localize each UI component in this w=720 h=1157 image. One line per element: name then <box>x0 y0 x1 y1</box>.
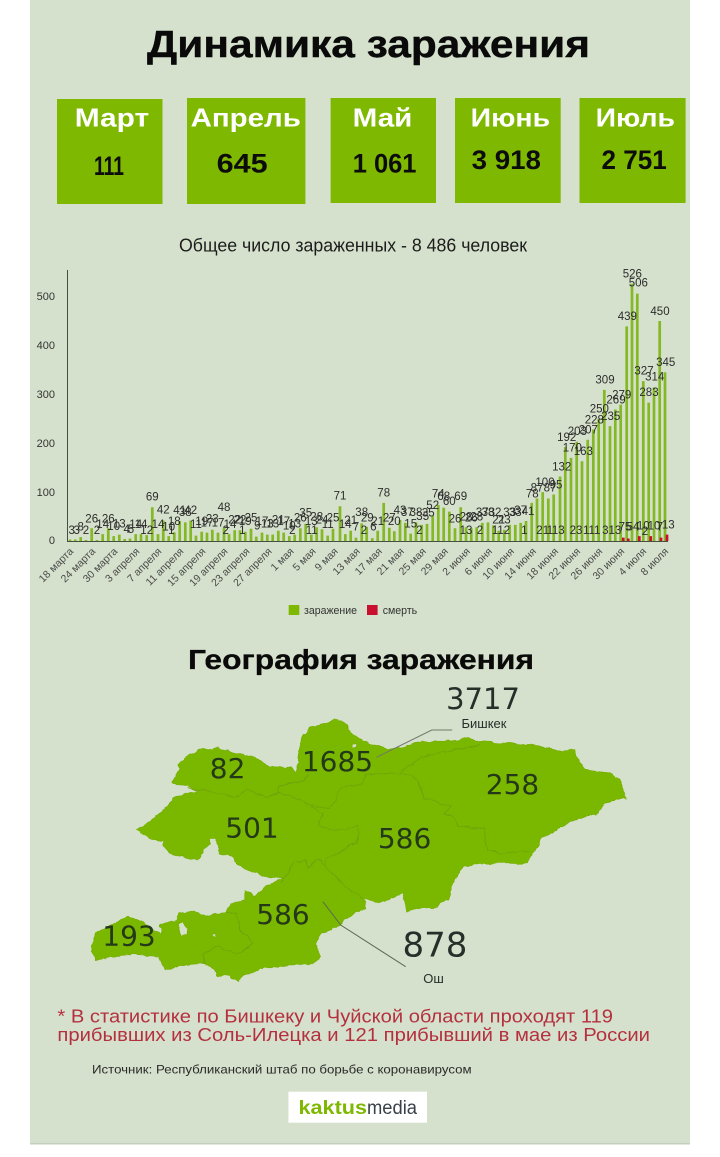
callout: Bishkek <box>446 682 520 731</box>
data labels: 23 <box>498 514 511 526</box>
x axis date labels: 8 июля <box>639 546 671 578</box>
data labels: 69 <box>146 492 159 504</box>
data labels: 3 <box>73 525 80 537</box>
data labels: 28 <box>310 512 323 524</box>
data labels: 32 <box>489 507 501 519</box>
data labels: 26 <box>102 514 115 526</box>
map: Kyrgyzstan regions <box>92 682 627 986</box>
data labels: 17 <box>201 518 213 530</box>
data labels: 170 <box>563 443 582 455</box>
data labels: 5 <box>128 524 134 536</box>
data labels: 69 <box>454 491 467 503</box>
data labels: 78 <box>377 488 390 500</box>
data labels: 11 <box>190 519 202 531</box>
callout: Bishkek: 3717 <box>446 682 520 716</box>
data labels: 33 <box>503 507 516 519</box>
y axis labels <box>37 291 55 547</box>
chart legend: смерть <box>383 605 417 617</box>
x axis date labels: 18 марта <box>37 546 76 585</box>
data labels: 38 <box>355 507 368 519</box>
x axis date labels: 25 мая <box>397 546 429 578</box>
data labels: 37 <box>401 507 414 519</box>
data labels: 18 <box>168 516 181 528</box>
data labels: 17 <box>256 516 268 528</box>
card: May <box>331 98 436 203</box>
heading: geography: География заражения <box>188 644 534 675</box>
x axis date labels: 19 апреля <box>187 546 230 589</box>
data labels: 22 <box>234 514 246 526</box>
data labels <box>68 269 675 538</box>
region values: 586 <box>378 822 431 855</box>
chart legend <box>289 605 417 617</box>
data labels: 78 <box>526 488 539 500</box>
data labels: 17 <box>277 516 290 528</box>
x axis date labels: 26 июня <box>568 546 605 582</box>
data labels: 48 <box>218 502 230 514</box>
data labels: 25 <box>327 513 339 525</box>
death bars <box>623 535 667 541</box>
y axis labels: 200 <box>37 438 55 450</box>
data labels: 87 <box>531 483 543 495</box>
data labels: 71 <box>334 490 346 502</box>
data labels: 21 <box>492 514 505 526</box>
data labels: 27 <box>383 513 396 525</box>
x axis date labels: 4 июля <box>617 546 649 578</box>
data labels: 21 <box>272 514 285 526</box>
x axis date labels: 18 июня <box>524 546 561 582</box>
data labels: 112 <box>492 525 510 537</box>
data labels: 327 <box>634 365 654 377</box>
data labels: 283 <box>639 387 659 399</box>
data labels: 38 <box>179 507 192 519</box>
data labels: 14 <box>224 519 237 531</box>
data labels: 20 <box>388 516 401 528</box>
card: July <box>580 98 686 203</box>
x axis date labels: 11 апреля <box>144 546 186 588</box>
data labels: 22 <box>228 514 241 526</box>
data labels: 26 <box>85 514 98 526</box>
data labels: 2 <box>642 526 648 538</box>
data labels: 13 <box>261 519 274 531</box>
callout: Osh <box>403 926 467 986</box>
x axis date labels: 7 апреля <box>125 546 164 585</box>
x axis date labels <box>37 546 671 589</box>
leader line: Bishkek <box>376 730 452 757</box>
region values <box>102 745 539 953</box>
title: Динамика заражения <box>147 24 590 66</box>
data labels: 42 <box>184 505 197 517</box>
x axis date labels: 22 июня <box>546 546 583 582</box>
data labels: 37 <box>476 507 489 519</box>
y axis labels: 500 <box>37 291 55 303</box>
data labels: 33 <box>509 507 522 519</box>
card: March: Март <box>75 103 149 133</box>
x axis date labels: 27 апреля <box>231 546 275 589</box>
data labels: 10 <box>162 522 175 534</box>
data labels: 11 <box>306 525 318 537</box>
data labels: 526 <box>623 269 642 281</box>
footnote <box>57 1007 650 1045</box>
data labels: 2 <box>94 525 100 537</box>
card: April: Апрель <box>191 103 301 133</box>
data labels: 26 <box>449 513 461 525</box>
x axis date labels: 15 апреля <box>165 546 208 589</box>
data labels: 41 <box>522 506 534 518</box>
x axis date labels: 29 мая <box>419 546 451 578</box>
card: June: Июнь <box>471 103 550 133</box>
data labels: 203 <box>568 426 587 438</box>
x axis date labels: 3 апреля <box>103 546 142 585</box>
data labels: 19 <box>239 516 252 528</box>
data labels: 8 <box>77 522 84 534</box>
data labels: 2 <box>361 525 367 537</box>
data labels: 228 <box>585 414 604 426</box>
data labels: 52 <box>426 500 439 512</box>
x axis date labels: 1 мая <box>269 546 297 574</box>
logo: kaktus media: kaktus <box>298 1098 367 1119</box>
data labels: 28 <box>470 512 483 524</box>
callout: Osh: 878 <box>403 926 467 966</box>
data labels: 14 <box>339 519 352 531</box>
data labels: 95 <box>550 479 562 491</box>
source line: Источник: Республиканский штаб по борьбе с коронавирусом <box>92 1062 472 1076</box>
x axis date labels: 14 июня <box>502 546 539 582</box>
data labels: 35 <box>299 508 312 520</box>
x axis date labels: 10 июня <box>480 546 517 582</box>
footnote: * В статистике по Бишкеку и Чуйской области проходят 119 <box>57 1007 613 1027</box>
data labels: 35 <box>422 508 435 520</box>
x axis date labels: 30 июня <box>590 546 627 582</box>
data labels: 24 <box>316 514 329 526</box>
data labels: 23 <box>570 525 582 537</box>
axes <box>68 270 668 542</box>
data labels: 163 <box>574 446 593 458</box>
leader line: Osh <box>323 902 406 967</box>
data labels: 19 <box>195 516 208 528</box>
data labels: 68 <box>437 491 450 503</box>
data labels: 192 <box>557 432 576 444</box>
map shape and region borders <box>92 719 627 982</box>
card: May: Май <box>353 103 412 133</box>
x axis date labels: 21 мая <box>375 546 407 578</box>
data labels: 10 <box>648 520 660 532</box>
data labels: 314 <box>645 372 665 384</box>
data labels: 1 <box>168 525 175 537</box>
data labels: 13 <box>552 525 565 537</box>
data labels: 13 <box>460 525 472 537</box>
data labels: 26 <box>294 513 307 525</box>
data labels: 2 <box>477 525 483 537</box>
data labels: 313 <box>602 525 621 537</box>
data labels: 42 <box>157 504 170 516</box>
callout: Bishkek: Бишкек <box>462 716 507 731</box>
region values: 586 <box>256 898 310 931</box>
data labels: 35 <box>416 511 429 523</box>
data labels: 4 <box>123 524 130 536</box>
y axis labels: 100 <box>37 487 55 499</box>
card: May: 1 061 <box>353 149 416 179</box>
region values: 501 <box>225 812 279 845</box>
data labels: 1 <box>521 525 528 537</box>
data labels: 43 <box>394 505 406 517</box>
data labels: 12 <box>140 525 153 537</box>
subtitle: total infected: Общее число зараженных - 8 486 человек <box>179 236 527 256</box>
data labels: 21 <box>344 515 357 527</box>
region values: 258 <box>486 768 539 801</box>
data labels: 235 <box>601 411 620 423</box>
data labels: 13 <box>288 519 301 531</box>
card: April <box>187 98 305 204</box>
card: June <box>455 98 561 203</box>
data labels: 60 <box>443 496 456 508</box>
data labels: 74 <box>432 488 445 500</box>
data labels: 2 <box>289 525 296 537</box>
x axis date labels: 2 июня <box>440 546 473 578</box>
x axis date labels: 17 мая <box>353 546 385 578</box>
data labels: 2 <box>416 525 423 537</box>
data labels: 11 <box>322 519 334 531</box>
card: April: 645 <box>217 149 268 179</box>
data labels: 111 <box>583 525 600 537</box>
data labels: 132 <box>552 462 571 474</box>
data labels: 14 <box>152 519 165 531</box>
data labels: 38 <box>410 507 422 519</box>
data labels: 2 <box>83 525 89 537</box>
chart legend: заражение <box>304 605 357 617</box>
callout: Osh: Ош <box>423 971 444 986</box>
data labels: 1 <box>239 525 246 537</box>
data labels: 3 <box>68 525 75 537</box>
bar chart: daily infections and deaths <box>37 269 675 617</box>
data labels: 87 <box>544 483 556 495</box>
y axis labels: 0 <box>49 535 55 547</box>
x axis date labels: 24 марта <box>59 546 98 585</box>
data labels: 10 <box>107 521 120 533</box>
data labels: 41 <box>173 505 186 517</box>
card: March <box>57 99 162 204</box>
y axis labels: 400 <box>37 340 55 352</box>
data labels: 207 <box>579 424 598 436</box>
x axis date labels: 23 апреля <box>209 546 252 589</box>
data labels: 10 <box>283 520 296 532</box>
card: July: 2 751 <box>602 145 667 175</box>
footnote: прибывших из Соль-Илецка и 121 прибывший в мае из России <box>57 1025 650 1045</box>
data labels: 25 <box>245 513 257 525</box>
data labels: 6 <box>370 522 377 534</box>
data labels: 13 <box>662 519 675 531</box>
data labels: 14 <box>135 519 148 531</box>
data labels: 38 <box>482 507 494 519</box>
data labels: 345 <box>656 357 675 369</box>
data labels: 17 <box>212 518 224 530</box>
data labels: 13 <box>266 519 279 531</box>
data labels: 15 <box>404 518 417 530</box>
data labels: 13 <box>305 516 318 528</box>
x axis date labels: 5 мая <box>291 546 319 574</box>
data labels: 21 <box>536 525 549 537</box>
data labels: 439 <box>618 311 637 323</box>
data labels: 29 <box>361 513 374 525</box>
data labels: 9 <box>254 520 261 532</box>
x axis date labels: 9 мая <box>313 546 341 574</box>
panel: monthly totals <box>57 98 686 204</box>
data labels: 100 <box>535 477 555 489</box>
data labels: 54 <box>627 522 640 534</box>
data labels: 14 <box>96 519 110 531</box>
data labels: 23 <box>206 513 219 525</box>
data labels: 450 <box>650 306 670 318</box>
data labels: 7 <box>657 522 663 534</box>
logo: kaktus media: media <box>367 1098 417 1119</box>
data labels: 13 <box>113 519 126 531</box>
data labels: 250 <box>590 404 609 416</box>
y axis labels: 300 <box>37 389 55 401</box>
data labels: 7 <box>353 522 359 534</box>
data labels: 21 <box>371 516 384 528</box>
data labels: 10 <box>637 520 650 532</box>
card: March: 111 <box>94 151 124 181</box>
data labels: 26 <box>465 513 478 525</box>
card: July: Июль <box>596 103 675 133</box>
region values: 82 <box>210 752 245 785</box>
data labels: 37 <box>514 505 527 517</box>
data labels: 506 <box>629 278 648 290</box>
infection bars <box>70 284 665 541</box>
data labels: 2 <box>222 525 229 537</box>
data labels: 309 <box>595 374 615 386</box>
data labels: 28 <box>460 512 472 524</box>
data labels: 269 <box>606 394 626 406</box>
data labels: 75 <box>619 522 631 534</box>
card: June: 3 918 <box>472 145 541 175</box>
data labels: 14 <box>129 519 143 531</box>
region values: 193 <box>102 920 156 953</box>
logo: kaktus media <box>288 1092 427 1123</box>
data labels: 279 <box>612 389 631 401</box>
region values: 1685 <box>302 745 373 778</box>
x axis date labels: 6 июня <box>462 546 495 578</box>
x axis date labels: 30 марта <box>81 546 120 585</box>
x axis date labels: 13 мая <box>331 546 363 578</box>
data labels: 1 <box>547 525 553 537</box>
